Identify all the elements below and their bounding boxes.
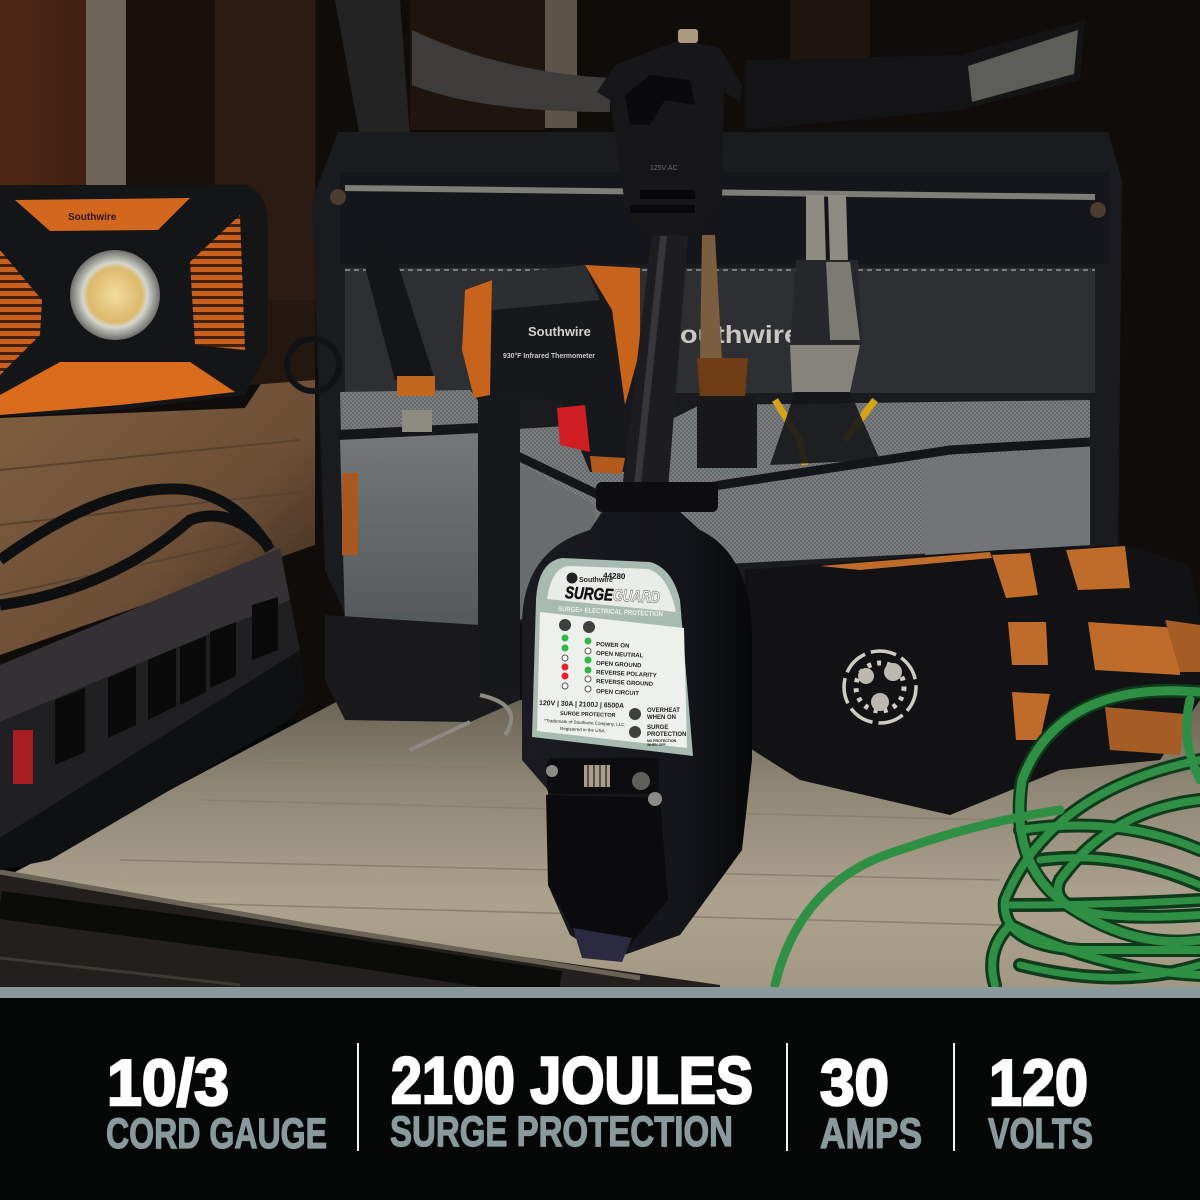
spec bar background bbox=[0, 998, 1200, 1200]
orange fins right bbox=[190, 215, 245, 350]
infrared thermometer: 930°F Infrared Thermometer bbox=[503, 351, 595, 360]
photo background: workshop wall bbox=[0, 0, 1200, 720]
infrared thermometer: Southwire bbox=[528, 324, 591, 339]
spec: surge protection: SURGE PROTECTION bbox=[390, 1108, 733, 1156]
logo and model: 44280 bbox=[603, 571, 626, 581]
divider bbox=[786, 1043, 788, 1151]
housing bbox=[522, 512, 752, 960]
status indicators bbox=[629, 708, 686, 747]
cord highlight layer bbox=[775, 691, 1200, 985]
label lower white area bbox=[537, 612, 687, 748]
status indicators: PROTECTION bbox=[647, 732, 686, 738]
SurgeGuard wordmark: GUARD bbox=[613, 586, 660, 607]
spec: surge protection bbox=[390, 1043, 753, 1156]
spec: amps bbox=[820, 1046, 922, 1158]
work gloves bbox=[745, 545, 1200, 815]
carabiner bbox=[410, 695, 511, 750]
strain relief bbox=[596, 482, 718, 512]
screwdriver bbox=[697, 235, 757, 468]
hanging strap bbox=[478, 400, 520, 690]
orange bottom panel bbox=[0, 362, 235, 415]
spec: cord gauge bbox=[106, 1046, 327, 1158]
pliers bbox=[770, 195, 880, 465]
orange top panel bbox=[15, 198, 190, 231]
spec: amps: 30 bbox=[820, 1046, 889, 1119]
LED labels: REVERSE GROUND bbox=[596, 679, 654, 688]
logo and model: Southwire bbox=[579, 577, 613, 584]
bag tool tops and handles bbox=[335, 0, 412, 165]
LED column bbox=[559, 619, 595, 692]
LED labels: OPEN GROUND bbox=[596, 661, 642, 669]
rivets bbox=[330, 189, 346, 205]
ratings: Registered in the USA. bbox=[560, 726, 606, 733]
lower left pocket bbox=[340, 430, 480, 625]
work light: Southwire bbox=[68, 212, 117, 223]
upper pockets bbox=[340, 390, 1090, 610]
status indicators: WHEN ON bbox=[647, 715, 676, 721]
orange fins left bbox=[0, 250, 42, 375]
top strap bbox=[340, 172, 1110, 264]
ratings: SURGE PROTECTOR bbox=[560, 711, 616, 719]
cords bbox=[0, 489, 270, 605]
cord shadow layer bbox=[992, 691, 1200, 985]
front beam of deck bbox=[0, 870, 720, 987]
green extension cord bbox=[775, 691, 1200, 985]
cord stem bbox=[622, 232, 688, 490]
lower outlet cover bbox=[546, 795, 668, 945]
right pocket bbox=[925, 445, 1090, 555]
spec: volts bbox=[988, 1046, 1093, 1158]
tool bag bbox=[287, 0, 1122, 722]
spring hinge bbox=[546, 758, 662, 806]
SurgeGuard wordmark: SURGE bbox=[565, 583, 614, 605]
glove logo bbox=[844, 651, 916, 723]
LED labels bbox=[596, 642, 657, 697]
main fabric panel bbox=[345, 268, 1095, 393]
spec: amps: AMPS bbox=[820, 1110, 922, 1158]
label top white area bbox=[547, 566, 676, 612]
LED labels: OPEN NEUTRAL bbox=[596, 651, 644, 659]
infrared thermometer bbox=[462, 262, 640, 474]
status indicators: OVERHEAT bbox=[647, 708, 680, 714]
status indicators: NO PROTECTION bbox=[647, 739, 677, 743]
label panel bbox=[532, 558, 693, 756]
mid pocket bbox=[505, 455, 595, 620]
spec: surge protection: 2100 JOULES bbox=[391, 1043, 753, 1117]
plug head bbox=[597, 40, 742, 235]
logo and model bbox=[566, 571, 626, 584]
spec: volts: VOLTS bbox=[988, 1110, 1093, 1158]
base of bag bbox=[325, 615, 520, 722]
plug rating text: 125V AC bbox=[650, 165, 678, 172]
bag body bbox=[312, 132, 1122, 625]
surge guard device bbox=[522, 29, 752, 962]
wooden crate bbox=[0, 300, 315, 655]
ratings: 120V | 30A | 2100J | 6500A bbox=[539, 700, 624, 710]
protection strip text: SURGE+ ELECTRICAL PROTECTION bbox=[558, 606, 663, 618]
floor: wooden deck bbox=[0, 700, 1200, 987]
orange trim bbox=[342, 473, 358, 555]
spec: volts: 120 bbox=[989, 1046, 1088, 1119]
left pocket tool bbox=[358, 240, 435, 380]
LED labels: POWER ON bbox=[596, 642, 630, 650]
ratings: *Trademark of Southwire Company, LLC. bbox=[544, 718, 626, 727]
spec: cord gauge: CORD GAUGE bbox=[106, 1110, 327, 1158]
ratings bbox=[539, 700, 626, 733]
lamp lens bbox=[70, 250, 160, 340]
scissors ring bbox=[287, 339, 339, 391]
status indicators: WHEN OFF bbox=[647, 743, 667, 747]
brand text on bag: outhwire bbox=[680, 321, 800, 349]
power strip bbox=[0, 489, 305, 870]
divider bbox=[357, 1043, 359, 1151]
LED labels: OPEN CIRCUIT bbox=[596, 689, 639, 697]
work light bbox=[0, 185, 268, 417]
divider bbox=[953, 1043, 955, 1151]
SurgeGuard wordmark bbox=[565, 583, 660, 607]
LED labels: REVERSE POLARITY bbox=[596, 670, 657, 679]
divider band bbox=[0, 987, 1200, 998]
status indicators: SURGE bbox=[647, 725, 668, 731]
spec: cord gauge: 10/3 bbox=[107, 1046, 229, 1119]
